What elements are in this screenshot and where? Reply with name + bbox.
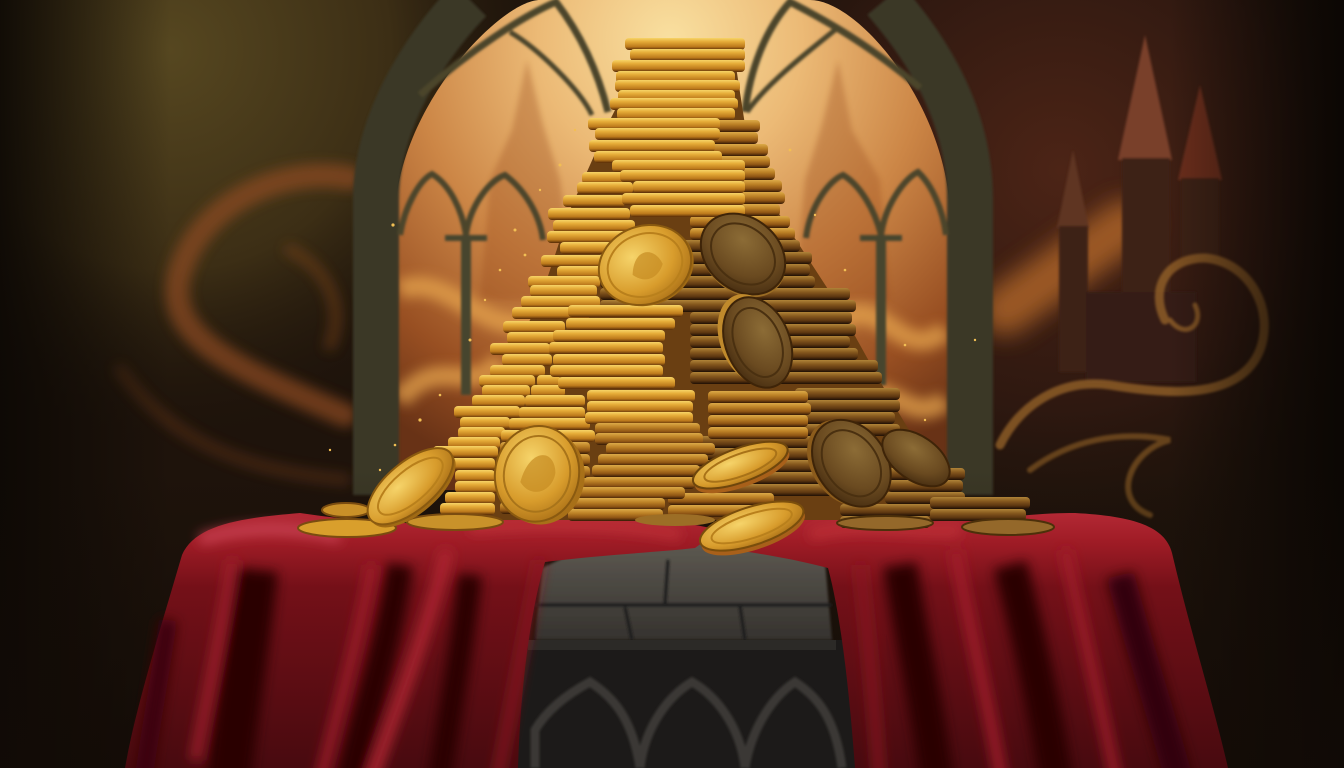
table pedestal — [510, 540, 856, 768]
lower center coins — [500, 423, 715, 521]
left drape — [125, 513, 720, 768]
gothic window — [376, 0, 970, 495]
cloth folds — [142, 524, 1182, 768]
stone slab — [535, 540, 832, 640]
coin: center tilted — [688, 432, 795, 503]
right front mid coins — [668, 391, 811, 517]
window glow and distant castle — [395, 0, 950, 490]
gold sparkles — [329, 129, 976, 471]
coin: far right dark — [872, 418, 960, 498]
coin: front tilted — [694, 491, 810, 566]
window stone frame — [376, 0, 970, 495]
rear right upper coins — [690, 120, 795, 240]
right smoke swirl — [1000, 258, 1264, 515]
right orange smoke — [1005, 225, 1125, 310]
red velvet tablecloth — [125, 513, 1228, 768]
pile backdrop — [455, 60, 945, 520]
coin: dark upper right — [683, 197, 803, 314]
right drape — [690, 513, 1228, 768]
rear right dark coins — [600, 240, 1030, 528]
coin: lower right dark — [791, 402, 907, 524]
coin: bright front — [487, 419, 593, 531]
upper and left bright coins — [433, 38, 745, 515]
carved arches — [535, 682, 842, 768]
coin: left tilted — [355, 434, 468, 541]
large leaning coins — [355, 197, 960, 566]
coin: dark middle — [705, 282, 805, 400]
right castle silhouette — [1057, 35, 1222, 382]
scattered flat coins — [298, 503, 1054, 537]
coin: bright upper — [587, 212, 705, 320]
left smoke swirl — [120, 176, 350, 480]
coin pile — [433, 38, 1030, 528]
